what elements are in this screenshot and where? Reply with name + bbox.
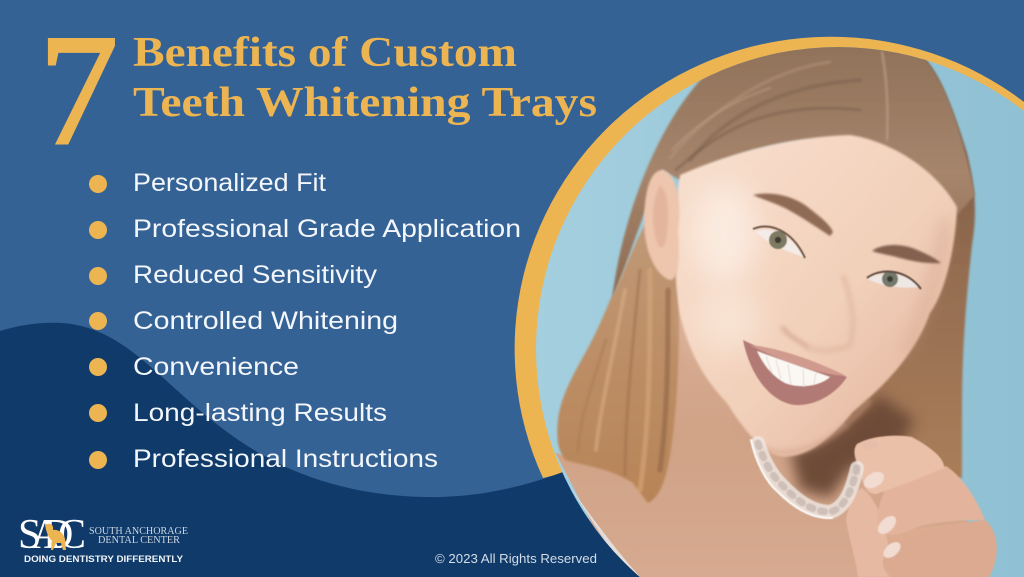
logo: South Anchorage Dental Center bbox=[18, 512, 188, 564]
benefits list bbox=[89, 169, 521, 473]
white shirt strip bbox=[568, 484, 640, 577]
thumb bbox=[846, 488, 890, 577]
left eye bbox=[753, 227, 805, 258]
item: professional grade application: Professional Grade Application bbox=[133, 215, 521, 243]
top hair bbox=[612, 44, 975, 300]
logo tagline: DOING DENTISTRY DIFFERENTLY bbox=[24, 554, 183, 564]
clear whitening tray bbox=[751, 440, 857, 518]
ring finger bbox=[883, 520, 997, 577]
upper lip bbox=[750, 345, 846, 376]
right hair bbox=[840, 57, 975, 478]
tooth gaps bbox=[766, 356, 816, 387]
left hair bbox=[557, 215, 679, 503]
hand with fingers bbox=[846, 436, 997, 577]
face bbox=[675, 135, 957, 457]
photo backdrop bbox=[536, 47, 1024, 577]
lower lip bbox=[743, 340, 847, 405]
item: long-lasting results: Long-lasting Results bbox=[133, 399, 387, 427]
item: convenience bbox=[89, 353, 299, 381]
middle finger bbox=[878, 466, 985, 535]
item: personalized fit: Personalized Fit bbox=[133, 169, 326, 197]
cheek highlight bbox=[696, 293, 762, 354]
left eyebrow bbox=[753, 193, 833, 236]
gold ring bbox=[515, 37, 1024, 478]
icon: gold ram bbox=[45, 524, 66, 550]
hair parting and strands bbox=[670, 52, 887, 170]
index finger bbox=[854, 436, 944, 494]
neck and shoulders bbox=[555, 300, 985, 577]
face highlight bbox=[693, 185, 757, 285]
item: controlled whitening: Controlled Whitening bbox=[133, 307, 398, 335]
dark wave footer bbox=[0, 323, 760, 577]
nose bbox=[782, 275, 853, 351]
right eye bbox=[867, 271, 921, 289]
big number seven: 7 bbox=[39, 3, 118, 178]
logo monogram: SADC bbox=[18, 512, 86, 558]
item: professional instructions: Professional Instructions bbox=[133, 445, 438, 473]
item: reduced sensitivity: Reduced Sensitivity bbox=[133, 261, 378, 289]
title line 1: Benefits of Custom bbox=[133, 30, 517, 76]
copyright: © 2023 All Rights Reserved bbox=[435, 551, 597, 566]
title bbox=[133, 30, 597, 126]
title line 2: Teeth Whitening Trays bbox=[133, 80, 597, 126]
chin shadow bbox=[767, 400, 872, 456]
teeth bbox=[757, 351, 830, 386]
hair shadow on right temple bbox=[905, 220, 945, 355]
logo name line 1: SOUTH ANCHORAGE bbox=[89, 526, 188, 537]
left hair strands bbox=[593, 268, 671, 492]
item: convenience: Convenience bbox=[133, 353, 299, 381]
logo name line 2: DENTAL CENTER bbox=[98, 535, 180, 546]
smile bbox=[743, 340, 847, 405]
palm bbox=[902, 522, 991, 577]
back hair shadow bbox=[790, 395, 915, 498]
ear bbox=[644, 170, 679, 280]
finger nails bbox=[864, 472, 901, 558]
right eyebrow bbox=[872, 245, 941, 263]
inner ear bbox=[653, 185, 668, 248]
photo: woman holding clear whitening tray bbox=[536, 44, 1024, 577]
